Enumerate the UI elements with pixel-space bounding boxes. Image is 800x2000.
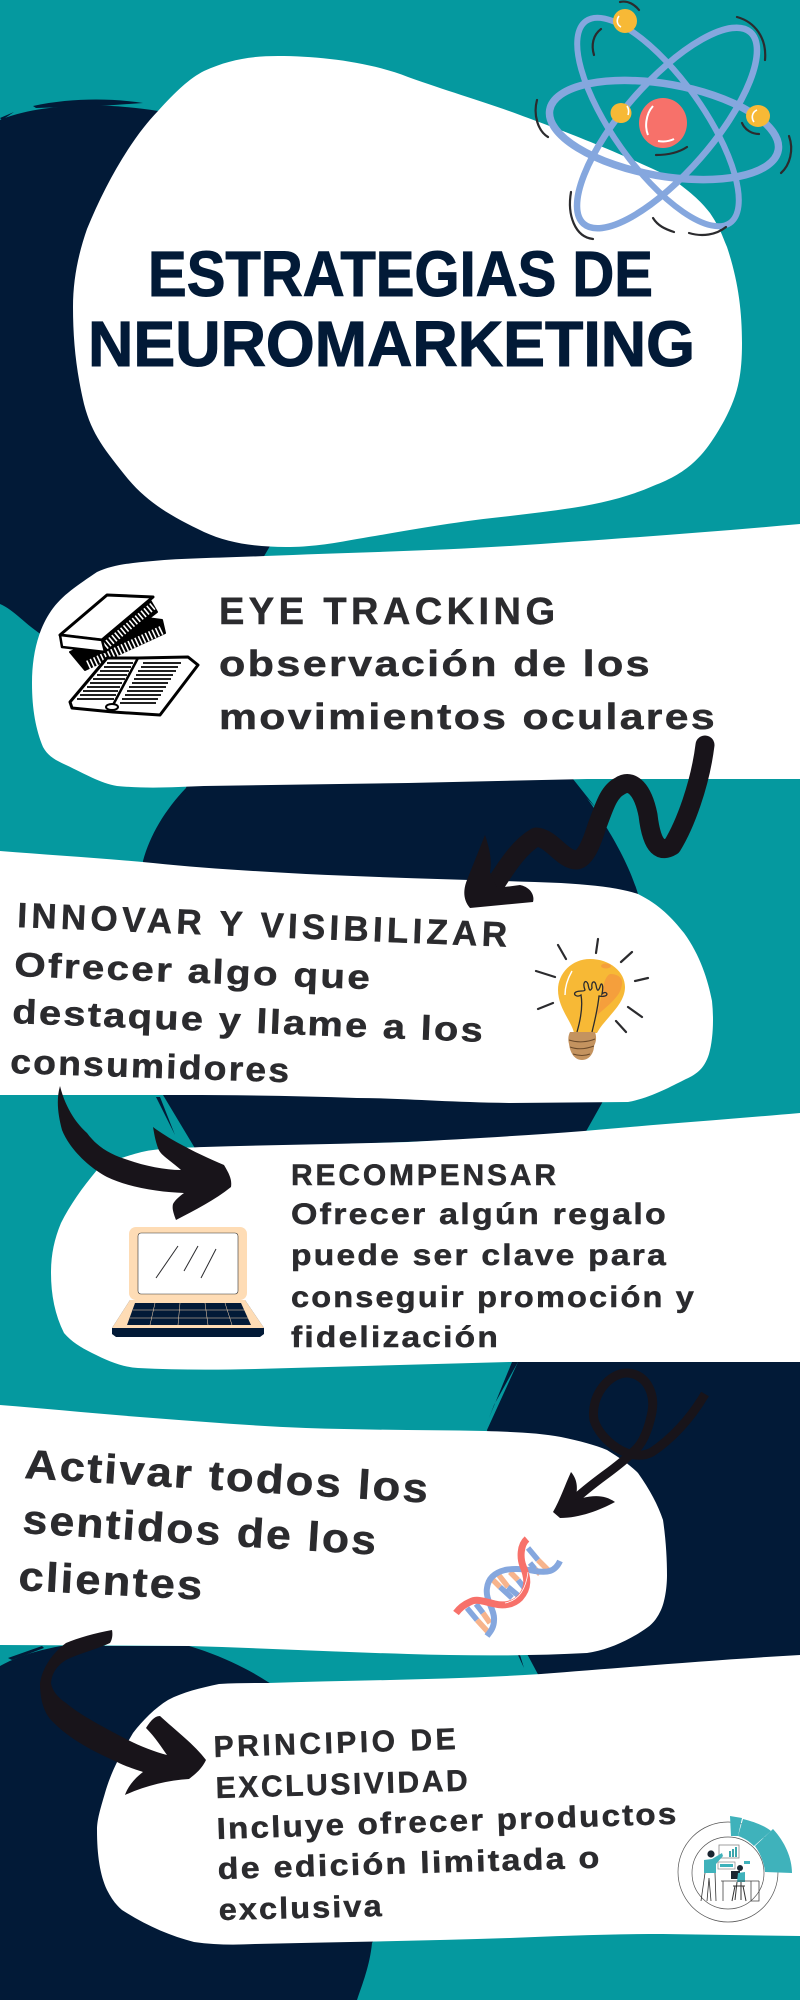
title — [88, 238, 695, 380]
text: exclusiva: exclusiva — [218, 1890, 384, 1927]
text: ofrecer algo que: Ofrecer algo que — [14, 946, 373, 997]
panel: recompensar — [51, 1113, 800, 1370]
text: ofrecer algún regalo: Ofrecer algún regalo — [291, 1198, 668, 1231]
icon: data analysis team — [678, 1816, 792, 1922]
heading: eye tracking: EYE TRACKING — [219, 591, 555, 633]
heading: recompensar: RECOMPENSAR — [291, 1159, 556, 1192]
heading: innovar y visibilizar: INNOVAR Y VISIBILIZAR — [17, 896, 508, 955]
title: NEUROMARKETING — [88, 308, 695, 380]
heading: exclusividad: EXCLUSIVIDAD — [215, 1765, 468, 1805]
text: puede ser clave para: puede ser clave para — [291, 1239, 668, 1272]
arrow: eye tracking to innovar — [464, 745, 705, 908]
panel: principio de exclusividad — [97, 1655, 800, 1945]
icon: atom — [536, 0, 791, 253]
text: sentidos de los: sentidos de los — [21, 1496, 380, 1564]
text: de edición limitada o: de edición limitada o — [217, 1842, 602, 1886]
icon: dna helix — [456, 1539, 560, 1636]
text: consumidores: consumidores — [10, 1043, 292, 1090]
text: fidelización: fidelización — [291, 1321, 500, 1354]
arrow: innovar to recompensar — [58, 1086, 231, 1220]
panel: activar todos los sentidos — [0, 1405, 667, 1655]
text: observación: observación de los — [219, 643, 652, 684]
text: activar todos los: Activar todos los — [23, 1441, 432, 1512]
text: movimientos: movimientos oculares — [219, 696, 717, 737]
title: ESTRATEGIAS DE — [148, 238, 653, 310]
icon: light bulb — [536, 939, 648, 1060]
panel: eye tracking — [32, 524, 800, 788]
text: clientes: clientes — [18, 1553, 206, 1609]
text: destaque: destaque y llame a los — [12, 993, 486, 1050]
heading: principio de: PRINCIPIO DE — [213, 1723, 456, 1764]
text: incluye ofrecer productos: Incluye ofrecer productos — [216, 1798, 679, 1846]
icon: laptop — [112, 1227, 264, 1337]
panel: innovar y visibilizar — [0, 851, 713, 1103]
text: conseguir promoción y: conseguir promoción y — [291, 1281, 696, 1314]
arrow: activar to principio — [40, 1630, 206, 1795]
icon: books — [60, 595, 198, 715]
panel: title blob — [73, 56, 742, 547]
arrow: recompensar to activar — [553, 1373, 705, 1518]
